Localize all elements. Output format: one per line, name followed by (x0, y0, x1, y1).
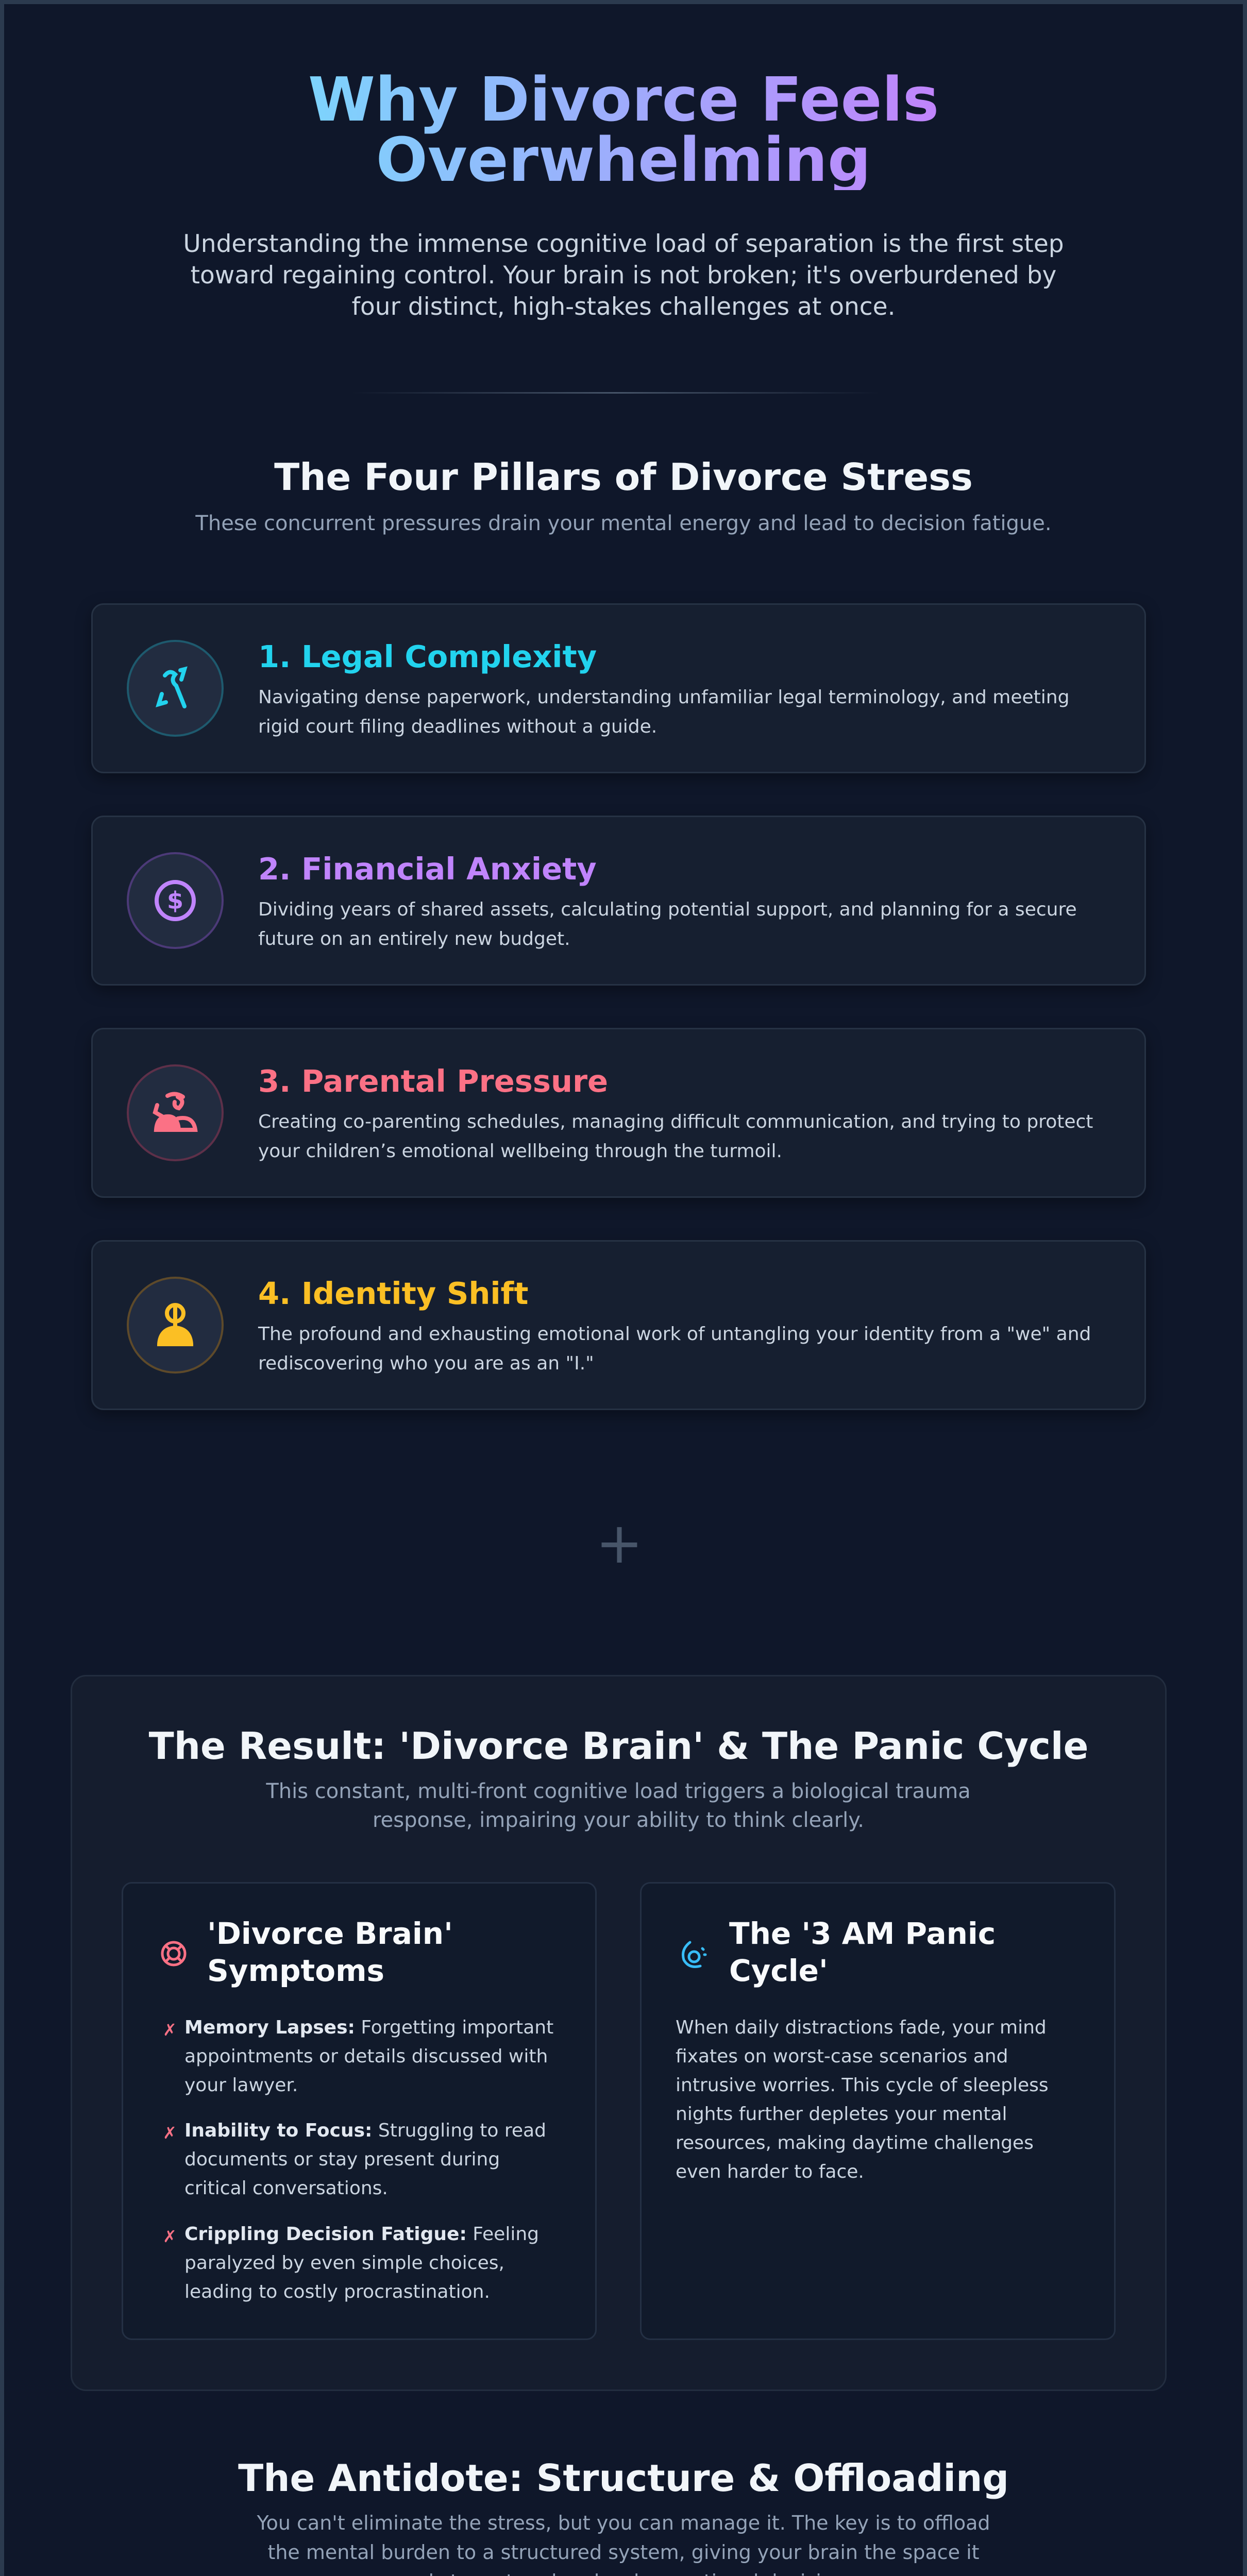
heading: four pillars: The Four Pillars of Divorce Stress (274, 455, 973, 499)
icon: plus sign: + (596, 1510, 643, 1576)
title: Overwhelming (376, 124, 871, 195)
icon: lifebuoy (161, 1941, 187, 1966)
icon: person (127, 1277, 224, 1374)
panel: divorce brain symptoms (122, 1882, 597, 2340)
description: Dividing years of shared assets, calculating potential support, and planning for a secure future on an entirely new budget. (258, 899, 1077, 950)
icon: money (127, 852, 224, 949)
card: legal complexity (91, 603, 1146, 773)
heading: 'Divorce Brain' (207, 1916, 453, 1951)
heading: The '3 AM Panic (729, 1916, 996, 1951)
bullet: memory: Memory Lapses: Forgetting important appointments or details discussed with your lawyer. (184, 2017, 553, 2096)
intro text: Understanding the immense cognitive load of separation is the first step toward regaining control. Your brain is not broken; it's overburdened by four distinct, high-stakes challenges at once. (183, 230, 1064, 321)
subheading: four pillars: These concurrent pressures drain your mental energy and lead to decision fatigue. (195, 512, 1052, 535)
title: 2. Financial Anxiety (258, 851, 597, 887)
heading (729, 1916, 996, 1988)
description: The profound and exhausting emotional work of untangling your identity from a "we" and rediscovering who you are as an "I." (258, 1324, 1091, 1374)
panel: divorce brain symptoms: ✗ (163, 2123, 177, 2143)
heading (207, 1916, 453, 1988)
panel: divorce brain symptoms: ✗ (163, 2020, 177, 2040)
description: Navigating dense paperwork, understanding unfamiliar legal terminology, and meeting rigid court filing deadlines without a guide. (258, 687, 1069, 737)
panel: 3 AM panic cycle (640, 1882, 1116, 2340)
title: Why Divorce Feels (308, 64, 939, 135)
bullet: focus: Inability to Focus: Struggling to read documents or stay present during critical conversations. (184, 2120, 546, 2199)
card: parental pressure (91, 1028, 1146, 1198)
icon: legal (127, 640, 224, 737)
heading: antidote: The Antidote: Structure & Offloading (238, 2456, 1009, 2500)
panel: divorce brain symptoms: ✗ (163, 2227, 177, 2246)
title (0, 70, 1247, 190)
card: financial anxiety (91, 816, 1146, 986)
icon: parent (127, 1064, 224, 1161)
body text: When daily distractions fade, your mind fixates on worst-case scenarios and intrusive worries. This cycle of sleepless nights further depletes your mental resources, making daytime challenges even harder to face. (676, 2017, 1049, 2182)
heading: result: The Result: 'Divorce Brain' & The Panic Cycle (149, 1724, 1088, 1768)
title: 3. Parental Pressure (258, 1063, 608, 1099)
description: Creating co-parenting schedules, managing difficult communication, and trying to protect your children’s emotional wellbeing through the turmoil. (258, 1111, 1093, 1162)
title: 4. Identity Shift (258, 1276, 528, 1311)
subheading: result: This constant, multi-front cognitive load triggers a biological trauma response, impairing your ability to think clearly. (266, 1780, 971, 1832)
bullet: decision fatigue: Crippling Decision Fatigue: Feeling paralyzed by even simple choices, leading to costly procrastination. (184, 2224, 539, 2302)
card: identity shift (91, 1240, 1146, 1410)
title: 1. Legal Complexity (258, 639, 597, 674)
icon: money: $ (167, 887, 183, 914)
icon: moon clock (682, 1941, 707, 1968)
panel: result (71, 1675, 1167, 2391)
heading: Cycle' (729, 1953, 828, 1988)
heading: Symptoms (207, 1953, 384, 1988)
